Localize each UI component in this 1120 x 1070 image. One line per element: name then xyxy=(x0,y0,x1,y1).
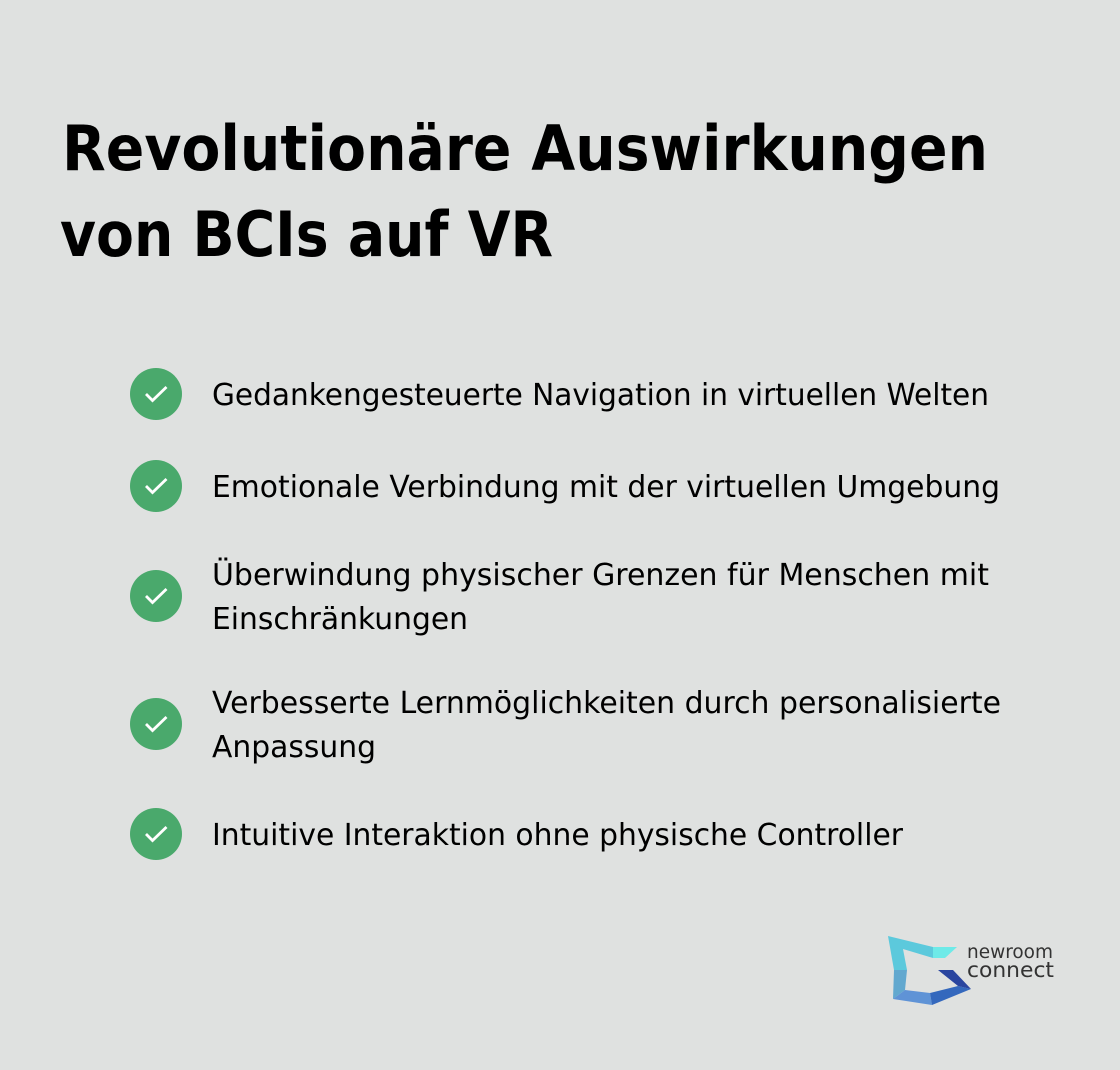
list item 5 xyxy=(130,808,904,860)
text: item 3: Einschränkungen xyxy=(212,602,468,637)
text: item 4: Verbesserte Lernmöglichkeiten durch personalisierte xyxy=(212,686,1001,721)
icon: check circle 3 xyxy=(130,570,182,622)
text: item 4 xyxy=(212,686,1001,765)
text: item 3 xyxy=(212,557,989,637)
list item 4 xyxy=(130,686,1001,765)
logo wordmark: newroom xyxy=(967,941,1053,963)
logo wordmark: connect xyxy=(967,958,1054,982)
list item 1 xyxy=(130,368,989,420)
icon: logo mark xyxy=(888,936,971,1005)
text: item 5: Intuitive Interaktion ohne physische Controller xyxy=(212,818,904,853)
list item 2 xyxy=(130,460,1000,512)
logo: newroom connect xyxy=(888,936,1054,1005)
text: item 1: Gedankengesteuerte Navigation in virtuellen Welten xyxy=(212,378,989,413)
icon: check circle 4 xyxy=(130,698,182,750)
text: item 2: Emotionale Verbindung mit der virtuellen Umgebung xyxy=(212,470,1000,505)
text: item 4: Anpassung xyxy=(212,730,376,765)
icon: check circle 1 xyxy=(130,368,182,420)
title: Revolutionäre Auswirkungen xyxy=(62,112,988,185)
title xyxy=(60,112,988,271)
icon: check circle 5 xyxy=(130,808,182,860)
title: von BCIs auf VR xyxy=(60,198,553,271)
text: item 3: Überwindung physischer Grenzen für Menschen mit xyxy=(212,557,989,593)
list item 3 xyxy=(130,557,989,637)
logo wordmark xyxy=(967,941,1054,982)
icon: check circle 2 xyxy=(130,460,182,512)
